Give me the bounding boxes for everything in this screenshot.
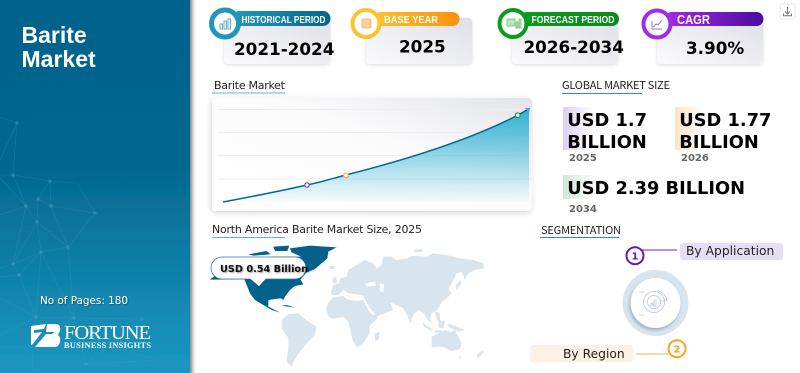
accent <box>563 175 595 199</box>
card body <box>224 18 330 64</box>
icon: bar chart badge <box>212 10 238 37</box>
number badge: 1 <box>632 252 639 262</box>
card body <box>366 18 472 64</box>
label pill: By Application <box>686 244 774 258</box>
icon: download button <box>780 4 795 19</box>
value: USD 1.77 <box>679 110 771 131</box>
callout: USD 0.54 Billion: USD 0.54 Billion <box>220 264 308 275</box>
panel: sidebar <box>0 0 190 373</box>
header pill <box>232 11 330 26</box>
value: 2025 <box>399 36 446 56</box>
segmentation hub <box>622 270 688 336</box>
connector <box>636 353 668 355</box>
card: base year <box>352 10 472 64</box>
map: world <box>210 246 484 367</box>
value: USD 1.7 <box>567 110 647 131</box>
page count: No of Pages: 180 <box>40 295 128 307</box>
sidebar title: Market <box>22 46 96 72</box>
value: BILLION <box>567 132 647 153</box>
value: 2026-2034 <box>524 37 624 57</box>
header pill <box>374 12 460 26</box>
label pill: By Region <box>563 347 625 361</box>
card: CAGR <box>644 10 764 64</box>
hub ring <box>622 270 688 336</box>
year: 2025 <box>569 153 597 164</box>
heading: segmentation: SEGMENTATION <box>541 222 621 238</box>
stat: 2034 size <box>563 175 745 215</box>
arrow head <box>525 108 530 113</box>
logo tagline: BUSINESS INSIGHTS <box>64 341 151 350</box>
accent <box>675 107 705 150</box>
number badge: 2 <box>674 344 681 356</box>
year: 2026 <box>681 153 709 164</box>
icon: forecast badge <box>500 10 526 37</box>
area fill <box>223 108 529 202</box>
card: historical period <box>212 10 334 64</box>
segment: By Application <box>626 243 783 264</box>
logo <box>31 322 151 350</box>
inland seas <box>365 282 384 292</box>
rest of world <box>282 249 484 367</box>
marker 2026 <box>344 173 348 178</box>
value: 3.90% <box>686 38 744 58</box>
value: USD 2.39 BILLION <box>567 178 745 199</box>
year: 2034 <box>569 204 597 215</box>
label pill <box>530 345 633 362</box>
stat: 2025 size <box>563 107 647 164</box>
network pattern <box>0 117 160 373</box>
header pill <box>520 12 619 26</box>
icon: growth badge <box>644 10 670 38</box>
segment: By Region <box>530 340 686 362</box>
trend line <box>223 110 527 202</box>
sidebar background <box>0 0 190 373</box>
header label: CAGR <box>677 13 710 27</box>
stat: 2026 size <box>675 107 771 164</box>
accent <box>563 107 593 150</box>
heading: North America: North America Barite Market Size, 2025 <box>212 223 422 236</box>
header label: BASE YEAR <box>384 14 438 26</box>
header label: HISTORICAL PERIOD <box>242 14 326 26</box>
callout: USD 0.54 Billion <box>211 257 308 286</box>
header label: FORECAST PERIOD <box>532 14 615 26</box>
logo mark <box>31 324 60 347</box>
value: BILLION <box>679 132 759 153</box>
heading: global market size: GLOBAL MARKET SIZE <box>562 77 670 93</box>
header pill <box>665 12 764 26</box>
number badge <box>668 340 686 357</box>
card body <box>512 18 618 64</box>
logo wordmark: FORTUNE <box>64 322 151 344</box>
north america highlighted <box>210 246 337 313</box>
chart panel <box>212 98 532 211</box>
marker 2025 <box>305 183 309 187</box>
chart: market growth area <box>212 98 532 211</box>
value: 2021-2024 <box>234 39 334 59</box>
icon: calendar badge <box>352 10 380 37</box>
marker 2034 <box>516 113 520 117</box>
connector <box>642 249 677 251</box>
heading: Barite Market: Barite Market <box>214 79 286 92</box>
number badge <box>626 247 644 264</box>
card: forecast period <box>500 10 624 64</box>
hub inner <box>630 278 680 328</box>
sidebar title: Barite <box>22 22 87 48</box>
icon: segmented chart <box>639 291 667 315</box>
card body <box>657 18 763 64</box>
